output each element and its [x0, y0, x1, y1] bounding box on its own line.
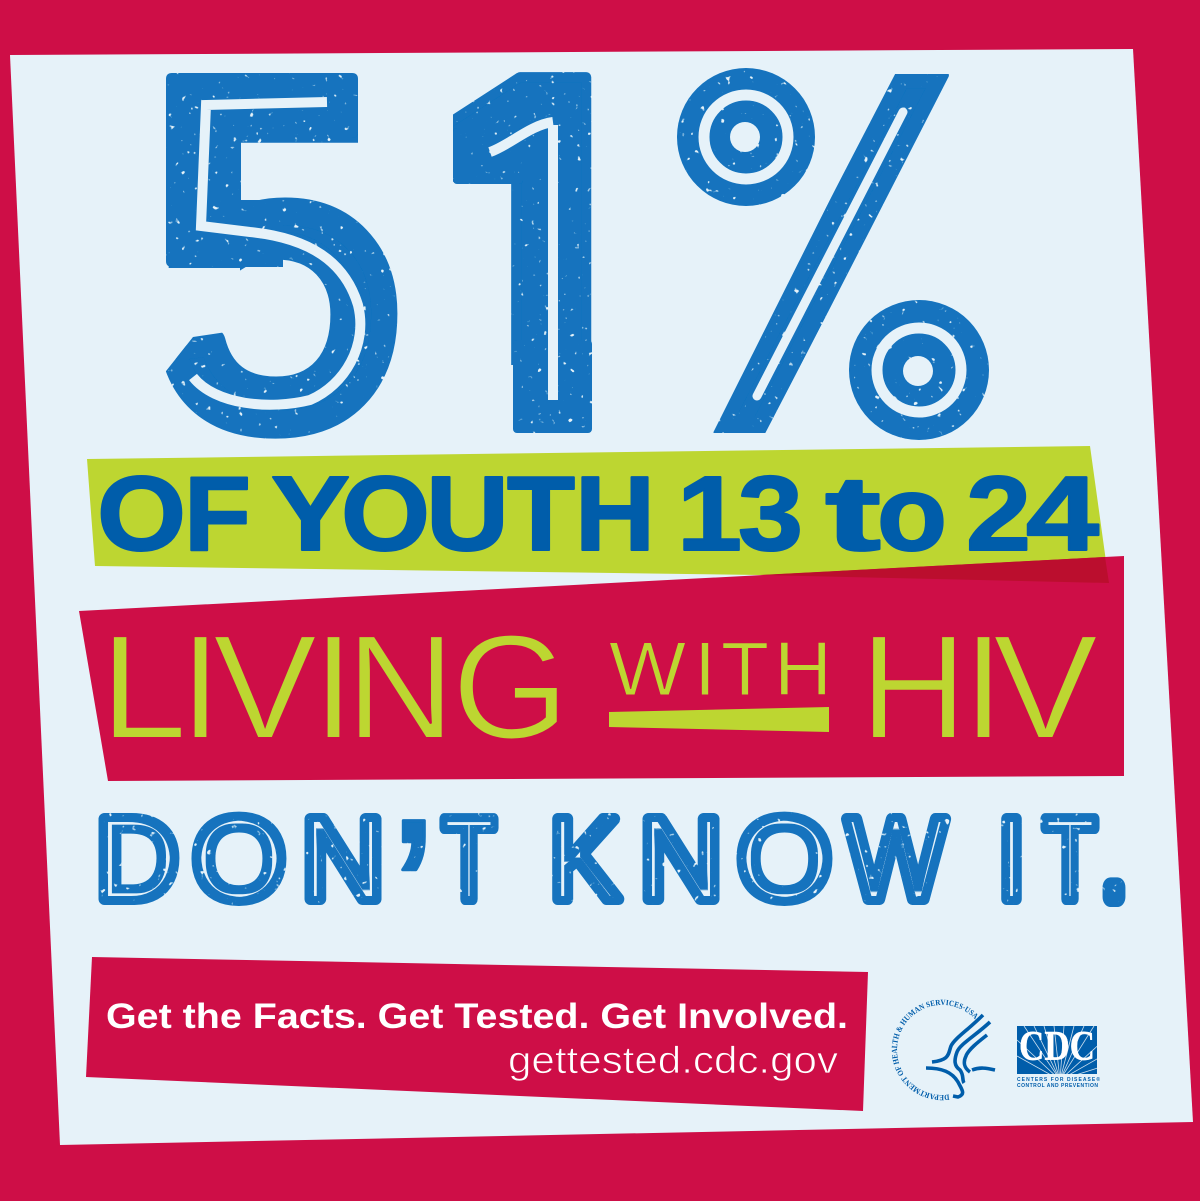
heading: don't know it: T [442, 794, 496, 924]
word: HIV: V [993, 605, 1098, 770]
headline number: 51% [166, 68, 989, 440]
heading: don't know it: . [1104, 817, 1124, 917]
underline bar [609, 707, 829, 732]
word: living: N [346, 605, 455, 770]
banner overlap [760, 557, 1109, 583]
word: with: W [609, 627, 686, 712]
lime banner [87, 446, 1109, 583]
heading: don't know it: K [549, 794, 620, 924]
heading: don't know it: D [95, 794, 179, 924]
heading: of youth 13 to 24: H [575, 455, 655, 573]
heading: don't know it: T [1043, 794, 1097, 924]
heading: of youth 13 to 24 [97, 455, 1099, 573]
heading: don't know it: N [639, 794, 723, 924]
CDC logo: CONTROL AND PREVENTION [1017, 1083, 1098, 1089]
heading: don't know it: W [846, 794, 946, 924]
word: with: H [774, 627, 832, 712]
HHS seal: DEPARTMENT OF HEALTH & HUMAN SERVICES·USA [892, 1000, 978, 1100]
CDC blue box [1017, 1026, 1097, 1074]
CDC logo [1017, 1026, 1100, 1087]
heading: don't know it: N [301, 794, 385, 924]
heading: living with HIV [100, 605, 1098, 770]
heading: of youth 13 to 24: F [184, 455, 251, 573]
call to action banner [86, 957, 868, 1111]
heading: of youth 13 to 24: U [426, 455, 509, 573]
heading: of youth 13 to 24: 2 [966, 455, 1031, 573]
heading: don't know it: T [1043, 794, 1097, 924]
heading: don't know it: T [442, 794, 496, 924]
heading: don't know it: N [639, 794, 723, 924]
word: HIV: H [860, 605, 967, 770]
word: living [100, 605, 569, 770]
digit 5: 5 [155, 0, 403, 521]
heading: don't know it [95, 773, 1124, 1019]
digit 1 [453, 72, 592, 433]
heading: of youth 13 to 24: o [877, 455, 947, 573]
word: living: G [452, 605, 569, 770]
digit 5 [166, 73, 398, 439]
heading: of youth 13 to 24: 3 [738, 455, 803, 573]
word: living: L [100, 605, 187, 770]
website: gettested.cdc.gov [508, 1040, 838, 1082]
heading: of youth 13 to 24: 1 [677, 455, 742, 573]
CDC logo: CDC [1019, 1024, 1095, 1070]
heading: don't know it: W [846, 794, 946, 924]
heading: don't know it: O [192, 794, 286, 924]
heading: don't know it: I [997, 794, 1026, 924]
percent sign [677, 68, 989, 440]
crimson banner [79, 556, 1124, 781]
heading: of youth 13 to 24: Y [271, 455, 350, 573]
heading: don't know it: O [737, 794, 832, 924]
heading: don't know it: ’ [389, 773, 438, 1019]
heading: don't know it: K [549, 794, 620, 924]
word: with: T [721, 627, 769, 712]
heading: don't know it: I [997, 794, 1026, 924]
heading: of youth 13 to 24: 4 [1026, 455, 1099, 573]
word: living: I [180, 605, 221, 770]
heading: don't know it: D [95, 794, 179, 924]
word: HIV [860, 605, 1098, 770]
heading: of youth 13 to 24: T [507, 455, 575, 573]
heading: don't know it: O [192, 794, 286, 924]
CDC caption: CENTERS FOR DISEASE® [1017, 1076, 1100, 1083]
word: living: I [313, 605, 354, 770]
heading: of youth 13 to 24: t [825, 455, 881, 573]
word: with [609, 627, 832, 712]
heading: don't know it: N [301, 794, 385, 924]
heading: don't know it: O [737, 794, 832, 924]
heading: of youth 13 to 24: O [341, 455, 430, 573]
call to action text: Get the Facts. Get Tested. Get Involved. [106, 997, 848, 1036]
heading: of youth 13 to 24: O [97, 455, 186, 573]
word: with: I [694, 627, 716, 712]
word: HIV: I [963, 605, 1004, 770]
word: living: V [213, 605, 317, 770]
